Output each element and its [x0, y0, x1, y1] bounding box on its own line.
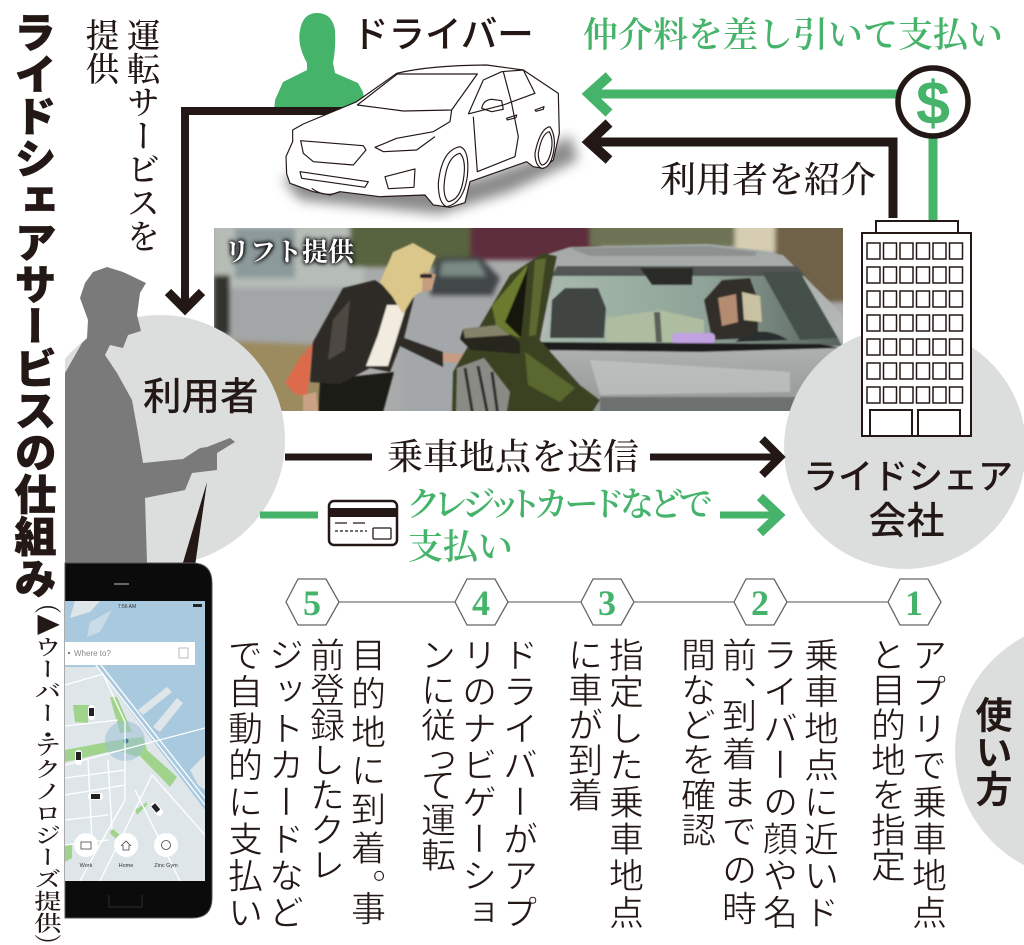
arrow: referral to driver: [589, 123, 893, 218]
panel: ride-share photo: [214, 222, 850, 416]
car side and door: [452, 253, 600, 416]
step 1 text: [866, 637, 946, 931]
label: driver: ドライバー: [352, 14, 534, 55]
phone pointer: [182, 482, 207, 566]
step 4 text: [416, 637, 537, 931]
step 3 hexagon: [581, 579, 634, 625]
label: payment: 支払い: [408, 528, 513, 567]
step 2 hexagon: [734, 579, 787, 625]
step 3 text: [563, 637, 643, 931]
step 2 text: 間などを確認: [676, 637, 715, 847]
step 5 text: 前登録したクレ: [305, 637, 344, 882]
step 2 text: 前 、 到着までの時: [717, 637, 756, 929]
icon: credit card: [329, 501, 397, 545]
label: ride-share company: ライドシェア: [803, 458, 1013, 497]
icon: smartphone with map app: [65, 563, 212, 918]
title: ライドシェアサービスの仕組み: [9, 11, 56, 599]
label: commission deducted: 仲介料を差し引いて支払い: [583, 16, 1003, 55]
arrow: driving service to user: [168, 111, 345, 309]
icon: smartphone with map app: 7:56 AM: [118, 604, 136, 610]
circle: company background: [784, 327, 1024, 569]
circle: user background: [65, 315, 285, 562]
arrow: send pick-up point: [285, 439, 780, 475]
step 4 text: ンに従 っ て運転: [416, 637, 455, 872]
step 4 text: ドライバーがアプ: [498, 637, 537, 931]
step 1 hexagon: [888, 579, 941, 625]
label: introduce users: 利用者を紹介: [660, 160, 876, 200]
step 5 text: で自動的に支払い: [223, 637, 262, 931]
icon: dollar coin: [898, 68, 968, 137]
label: send location: 乗車地点を送信: [387, 437, 639, 477]
icon: car: [283, 65, 578, 214]
step 3 text: 指定した乗車地点: [604, 637, 643, 931]
step 2 text: 乗車地点に近いド: [799, 637, 838, 931]
woman: [302, 242, 464, 411]
arrow: payment to driver: [589, 76, 933, 220]
step 5 text: 目的地に到着 。 事: [346, 637, 385, 929]
step 3 text: に車が到着: [563, 637, 602, 812]
car: [452, 244, 843, 416]
icon: smartphone with map app: Home: [119, 863, 133, 869]
step 5 hexagon: [286, 579, 339, 625]
step 2 hexagon: 2: [751, 583, 769, 623]
icon: driver silhouette: [274, 13, 366, 112]
step 1 text: アプリで乗車地点: [907, 637, 946, 931]
heading: how to use: 使い方: [970, 696, 1011, 807]
step 4 hexagon: 4: [472, 583, 490, 623]
label: user: 利用者: [143, 376, 259, 419]
step 2 text: ライバーの顔や名: [758, 637, 797, 931]
step 4 text: リのナビゲーショ: [457, 637, 496, 931]
icon: smartphone with map app: Where to?: [74, 649, 111, 658]
step 3 hexagon: 3: [598, 583, 616, 623]
icon: office building: [862, 221, 971, 436]
label: driving service: 運転サービスを: [121, 18, 158, 252]
label: driving service: [80, 18, 160, 252]
photo credit: リフト提供: [224, 238, 354, 267]
bag: [285, 353, 312, 396]
icon: smartphone with map app: Work: [80, 863, 93, 869]
arrow: card payment: [260, 497, 779, 533]
step 5 text: ジットカードなど: [264, 637, 303, 931]
label: driving service: 提供: [80, 18, 117, 85]
icon: user silhouette: [65, 267, 235, 570]
step connector and number hexagons: [286, 579, 941, 625]
circle: usage background: [955, 622, 1024, 880]
step 2 text: [676, 637, 838, 931]
step 5 text: [223, 637, 385, 931]
step 5 hexagon: 5: [303, 583, 321, 623]
step 1 hexagon: 1: [905, 583, 923, 623]
icon: smartphone with map app: Zinc Gym: [154, 863, 178, 869]
label: pay by credit card: クレジットカードなどで: [408, 487, 709, 524]
step 1 text: と目的地を指定: [866, 637, 905, 882]
label: ride-share company: 会社: [868, 501, 944, 543]
icon: dollar coin: $: [916, 69, 950, 137]
label: ride-share company: [803, 458, 1013, 543]
step 4 hexagon: [455, 579, 508, 625]
